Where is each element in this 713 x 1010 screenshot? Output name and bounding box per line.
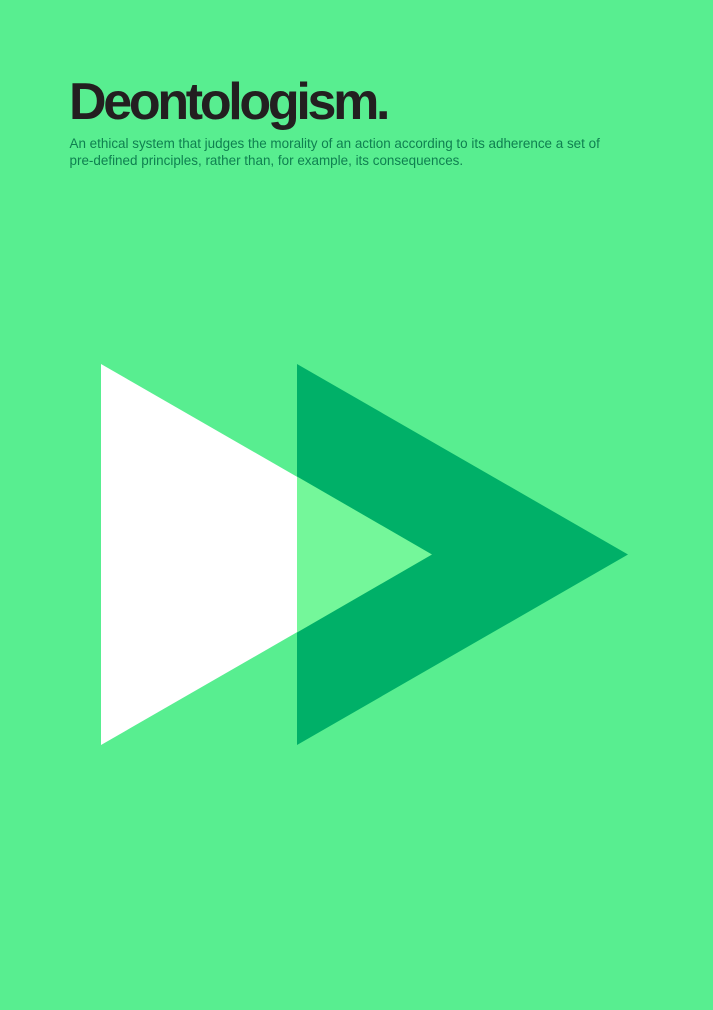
dark green triangle [297,364,628,745]
description text [70,136,600,168]
white triangle [101,364,432,745]
description text: pre-defined principles, rather than, for example, its consequences. [70,153,463,168]
description text: An ethical system that judges the morality of an action according to its adherence a set of [70,136,600,151]
light green overlap [297,476,432,632]
title: Deontologism. [69,73,387,131]
